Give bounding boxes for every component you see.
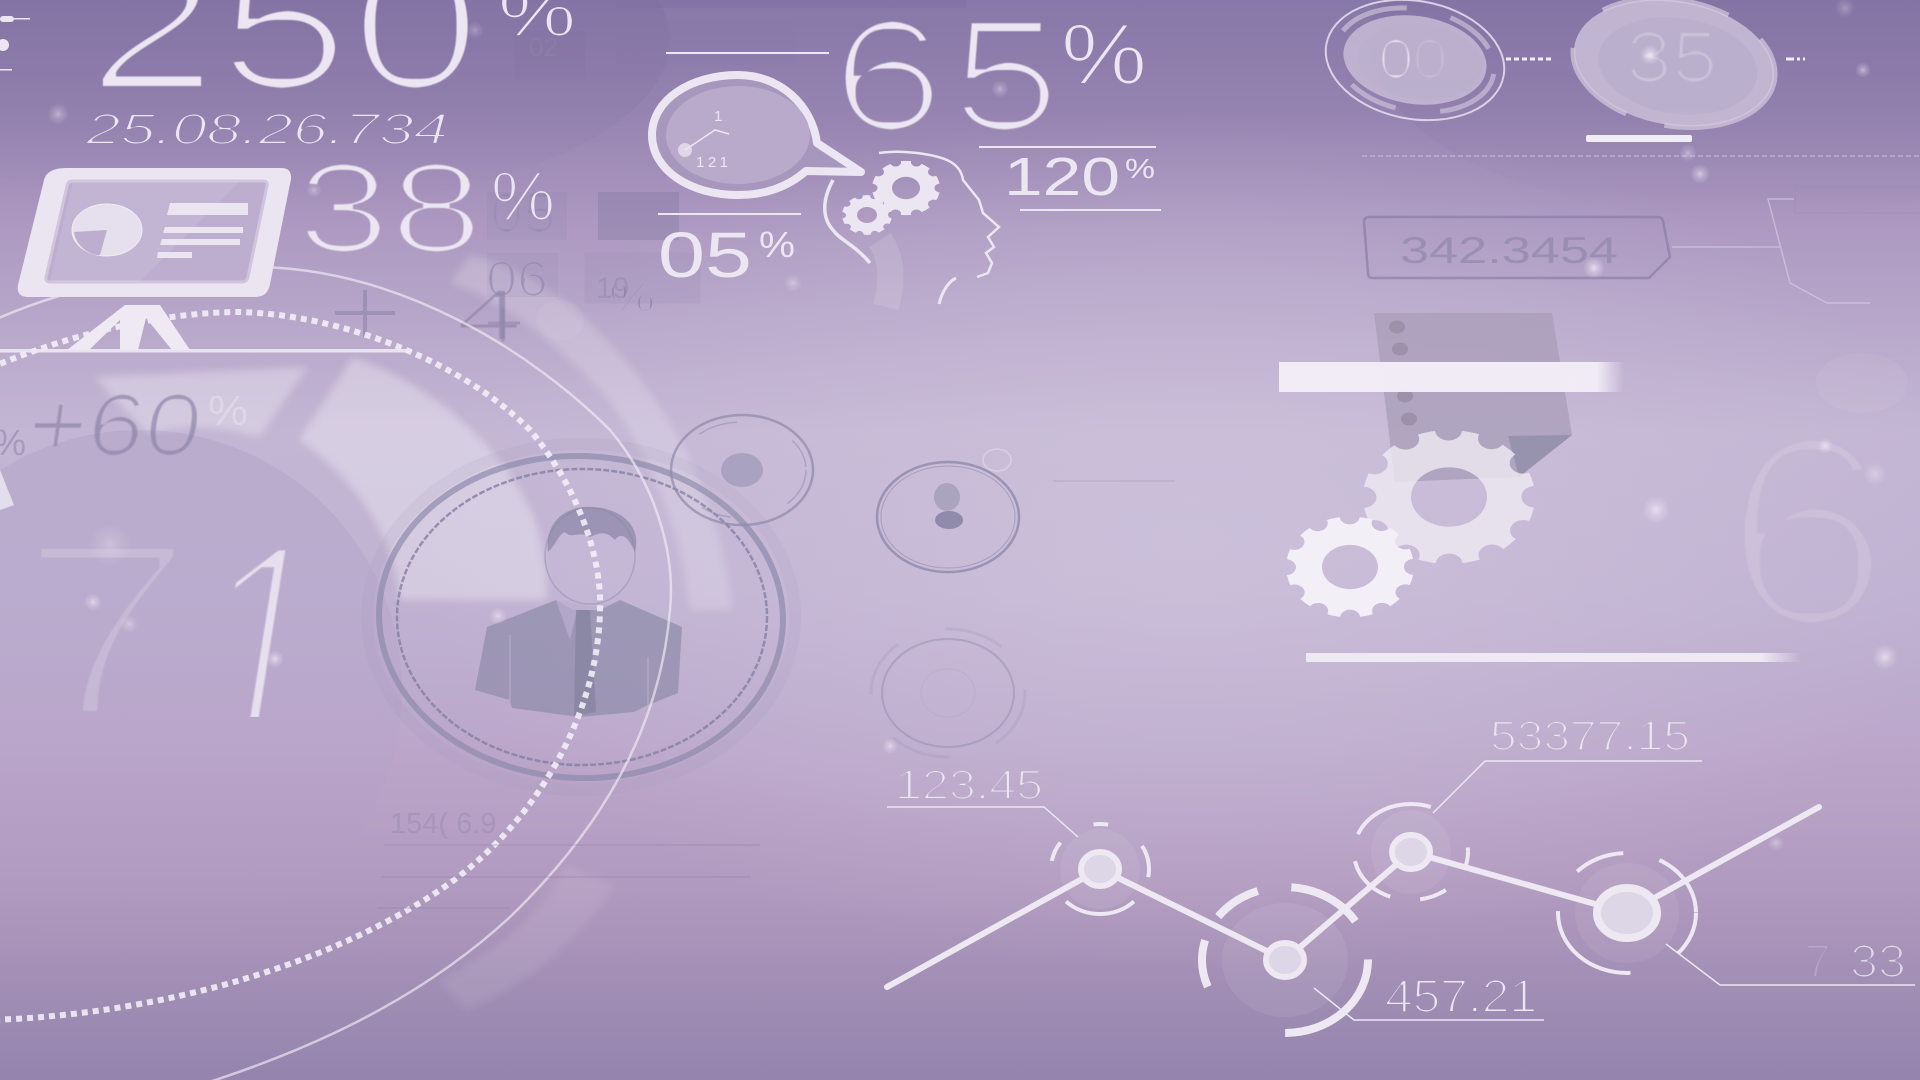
baseline under screen xyxy=(0,349,412,352)
icon: presentation screen xyxy=(18,168,291,350)
callout 7 33: 7 xyxy=(1805,935,1831,987)
dial 35: 35 xyxy=(1626,18,1718,98)
ghost plus signs and digit 4 xyxy=(335,276,584,356)
faint number 71 xyxy=(42,549,286,717)
callout 123.45: 123.45 xyxy=(895,761,1043,808)
dial 35 xyxy=(1563,0,1785,143)
figure 250% xyxy=(86,0,576,127)
chart halos xyxy=(1060,810,1679,1017)
rule above 65% xyxy=(666,52,829,54)
document xyxy=(1374,313,1572,482)
figure 05%: % xyxy=(759,224,795,265)
faint number 71: 7 xyxy=(18,490,196,769)
large gear xyxy=(1363,430,1535,564)
connector lines right xyxy=(1672,187,1920,303)
ghost data boxes top centre: % xyxy=(609,274,655,321)
connector dash and bar under dial 35 xyxy=(1586,59,1805,142)
main person portrait in ring xyxy=(367,444,795,790)
figure 05%: 05 xyxy=(658,219,752,291)
icon: document with gears xyxy=(1286,313,1572,618)
ghost data boxes top centre: 02 xyxy=(529,32,558,62)
gear: large head gear xyxy=(872,161,940,215)
figure 120%: 120 xyxy=(1004,147,1120,207)
ghost data boxes top centre: 06 xyxy=(486,251,548,307)
number 25.08.26.734: 25.08.26.734 xyxy=(85,105,448,154)
floating particles xyxy=(47,0,1898,851)
white bar lower xyxy=(1306,653,1801,662)
figure 120%: % xyxy=(1125,153,1155,184)
ghost data boxes top centre: 19 xyxy=(596,272,629,305)
figure 38%: 38 xyxy=(297,137,483,280)
callout 7 33: 33 xyxy=(1850,935,1906,987)
faint digit 6: 6 xyxy=(1722,379,1892,683)
small person ring, left xyxy=(671,415,813,525)
chart nodes xyxy=(1081,835,1657,977)
small gear xyxy=(1286,516,1414,618)
ghost figure +60% xyxy=(0,375,248,474)
dial: dotted ring xyxy=(0,312,600,1020)
figure 120% xyxy=(979,146,1161,211)
top-left fragment marks xyxy=(0,16,30,70)
value box 342.3454 xyxy=(1364,217,1670,278)
speech bubble with clock: 121 xyxy=(696,154,728,171)
small person ring, centre xyxy=(877,449,1019,572)
figure 38% xyxy=(297,137,555,280)
ghost data boxes top centre: 05 xyxy=(490,181,556,244)
faint number 71: 1 xyxy=(172,484,352,808)
chart rings xyxy=(1051,804,1696,1033)
callout 457.21 xyxy=(1314,970,1544,1022)
ghost data boxes top centre xyxy=(486,0,966,321)
head with gears xyxy=(825,152,999,307)
gear: small head gear xyxy=(842,195,892,235)
value box 342.3454: 342.3454 xyxy=(1400,230,1618,271)
ghost figure +60%: % xyxy=(208,387,248,434)
figure 38%: % xyxy=(491,157,555,235)
dial 00 xyxy=(1316,0,1514,134)
dashed rule xyxy=(1362,155,1920,157)
figure 65%: % xyxy=(1061,7,1147,103)
empty ring, centre xyxy=(871,629,1025,757)
callout 7 33 xyxy=(1666,935,1915,987)
callout 53377.15 xyxy=(1433,712,1702,813)
faint rule centre xyxy=(1053,480,1175,482)
line chart xyxy=(887,804,1819,1033)
white bar upper xyxy=(1279,362,1624,392)
ghost text and rules lower left xyxy=(377,808,760,908)
ghost text and rules lower left: 154( 6.9 xyxy=(390,808,496,840)
speech bubble with clock xyxy=(652,75,861,195)
ghost figure +60%: +60 xyxy=(21,375,209,474)
dotted connector xyxy=(1506,58,1553,60)
callout 123.45 xyxy=(887,761,1078,837)
ghost plus signs and digit 4: 4 xyxy=(456,276,522,356)
figure 65% xyxy=(830,0,1147,164)
dial 00: 0 xyxy=(1412,27,1448,90)
person: bust silhouette xyxy=(475,507,682,717)
figure 05% xyxy=(658,213,801,291)
speech bubble with clock: 1 xyxy=(714,108,722,125)
chart polyline xyxy=(887,807,1819,987)
callout 457.21: 457.21 xyxy=(1385,970,1537,1022)
callout 53377.15: 53377.15 xyxy=(1490,712,1690,759)
dial 00: 0 xyxy=(1378,27,1414,90)
left dial: translucent bands and wedges xyxy=(0,255,732,1010)
dial: thin outer ring xyxy=(0,267,671,1080)
